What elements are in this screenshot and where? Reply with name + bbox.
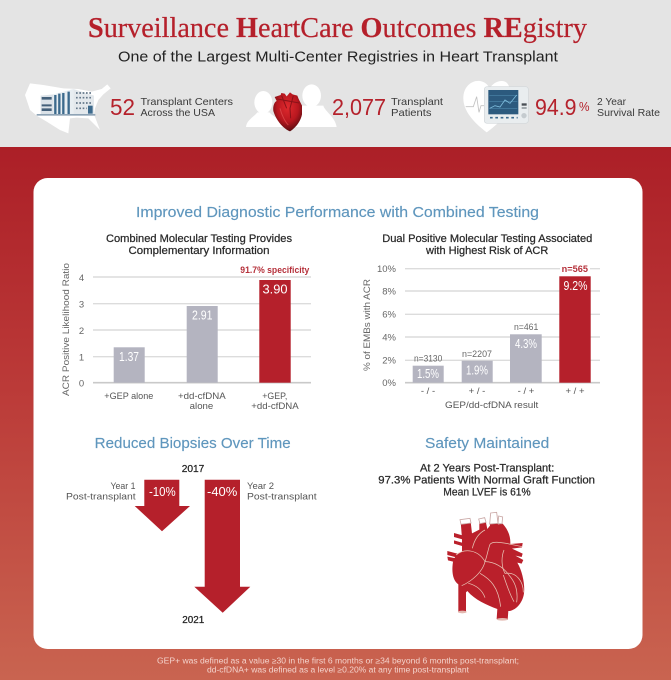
icon: anatomical heart xyxy=(273,92,302,131)
bar: -/+: 4.3% xyxy=(515,337,537,351)
chart: ACR positive likelihood ratio xyxy=(61,233,311,412)
x axis labels: +dd-cfDNA xyxy=(251,401,299,412)
x axis labels: +GEP, xyxy=(262,391,287,402)
x axis title: GEP/dd-cfDNA result xyxy=(445,400,539,411)
number: 2,077: 2,077 xyxy=(332,94,386,120)
chart title: Dual Positive Molecular Testing Associated xyxy=(382,233,592,245)
chart title: Complementary Information xyxy=(128,245,270,257)
label: year 1 post-transplant: Year 1 xyxy=(110,481,136,492)
bar: -/-: n=3130 xyxy=(414,354,442,364)
icon: USA map with hospital building xyxy=(25,83,111,133)
bar: +dd-cfDNA alone xyxy=(187,306,218,383)
y axis ticks: 4% xyxy=(382,332,397,344)
bar: -/+: n=461 xyxy=(514,322,538,332)
icon: heart with monitor xyxy=(463,81,528,132)
number: 52: 52 xyxy=(110,94,135,120)
arrow: year 2: -40% xyxy=(207,485,237,499)
bar: +GEP, +dd-cfDNA xyxy=(259,280,291,383)
safety summary text xyxy=(378,462,595,498)
x axis labels: - / + xyxy=(518,386,535,397)
bar: +GEP alone xyxy=(114,347,145,383)
chart title: Combined Molecular Testing Provides xyxy=(106,233,292,245)
bar: +/-: 1.9% xyxy=(466,364,488,378)
bar: +/-: n=2207 xyxy=(462,349,492,359)
bar: -/+ xyxy=(510,322,542,383)
label: year 2 post-transplant xyxy=(247,481,317,502)
heading: reduced biopsies: Reduced Biopsies Over Time xyxy=(95,435,291,452)
label: year 2 post-transplant: Year 2 xyxy=(247,481,274,492)
label: year 1 post-transplant xyxy=(66,481,136,502)
callout: specificity: 91.7% specificity xyxy=(240,265,310,276)
bar: -/-: 1.5% xyxy=(417,367,439,381)
number: 94.9%: 94.9 xyxy=(535,94,576,120)
x axis labels: +GEP alone xyxy=(104,391,153,402)
footnote: dd-cfDNA+ was defined as a level ≥0.20% at any time post-transplant xyxy=(207,666,470,674)
arrow: year 2 xyxy=(194,480,250,613)
label: 2 year: 2 Year xyxy=(597,96,626,108)
x axis labels: - / - xyxy=(421,386,435,397)
chart title xyxy=(106,233,292,257)
panel: white results card xyxy=(34,178,642,649)
x axis labels xyxy=(421,386,585,397)
x axis labels xyxy=(104,391,299,412)
icon: patient silhouettes xyxy=(246,84,337,127)
x axis labels: +dd-cfDNA xyxy=(178,391,226,402)
y axis title: ACR Positive Likelihood Ratio xyxy=(61,263,72,396)
safety summary text: 97.3% Patients With Normal Graft Function xyxy=(378,474,595,486)
arrow: year 1: -10% xyxy=(149,485,176,499)
footnote: GEP+ was defined as a value ≥30 in the first 6 months or ≥34 beyond 6 months post-transplant; xyxy=(157,656,519,666)
bar: +GEP, +dd-cfDNA: 3.90 xyxy=(262,282,288,296)
year label: 2017: 2017 xyxy=(182,463,204,475)
y axis ticks xyxy=(377,264,397,389)
chart title: with Highest Risk of ACR xyxy=(425,245,548,257)
x axis labels: + / + xyxy=(565,386,585,397)
y axis ticks: 10% xyxy=(377,264,397,275)
y axis ticks: 1 xyxy=(79,352,84,364)
label: across the USA: Across the USA xyxy=(140,107,215,119)
y axis ticks: 8% xyxy=(382,286,397,298)
footnote xyxy=(157,656,519,674)
label: transplant: Transplant xyxy=(391,96,443,108)
chart: percent of EMBs with ACR xyxy=(362,233,600,411)
stat: transplant patients xyxy=(246,84,443,131)
bar: +/+: n=565 xyxy=(562,264,588,274)
bar: +/+ xyxy=(559,264,591,383)
bar: +dd-cfDNA alone: 2.91 xyxy=(192,308,213,322)
y axis ticks: 3 xyxy=(79,300,84,310)
red background xyxy=(0,147,671,680)
y axis title: % of EMBs with ACR xyxy=(362,279,373,371)
year label: 2021: 2021 xyxy=(182,614,204,626)
percent sign: % xyxy=(579,99,590,114)
x axis labels: alone xyxy=(190,401,213,412)
y axis ticks: 2% xyxy=(382,356,397,366)
stat: transplant centers xyxy=(25,83,233,133)
label: survival rate: Survival Rate xyxy=(597,107,660,119)
y axis ticks: 4 xyxy=(79,273,84,284)
biopsy reduction arrows xyxy=(66,463,317,626)
bar: -/- xyxy=(413,354,444,383)
y axis ticks: 0 xyxy=(79,378,84,390)
subtitle: One of the Largest Multi-Center Registries in Heart Transplant xyxy=(118,48,559,66)
x axis labels: + / - xyxy=(469,386,485,397)
label: transplant centers: Transplant Centers xyxy=(140,96,233,108)
label: patients: Patients xyxy=(391,107,432,119)
title: Surveillance HeartCare Outcomes REgistry xyxy=(88,12,587,44)
label: year 1 post-transplant: Post-transplant xyxy=(66,492,136,502)
arrow: year 1 xyxy=(135,480,190,531)
y axis ticks xyxy=(79,273,84,390)
bar: +/+: 9.2% xyxy=(564,279,588,293)
heading: safety maintained: Safety Maintained xyxy=(425,435,549,452)
safety summary text: At 2 Years Post-Transplant: xyxy=(420,462,554,474)
header background xyxy=(0,0,671,148)
heading: improved diagnostic performance: Improved Diagnostic Performance with Combined Testing xyxy=(136,204,539,221)
label: year 2 post-transplant: Post-transplant xyxy=(247,492,317,502)
stat: survival rate xyxy=(463,81,660,132)
safety summary text: Mean LVEF is 61% xyxy=(443,486,531,498)
bar: +/- xyxy=(462,349,493,383)
y axis ticks: 6% xyxy=(382,310,397,320)
y axis ticks: 2 xyxy=(79,326,84,337)
chart title xyxy=(382,233,592,257)
y axis ticks: 0% xyxy=(382,378,397,389)
bar: +GEP alone: 1.37 xyxy=(119,350,139,364)
icon: anatomical heart illustration xyxy=(447,512,524,621)
